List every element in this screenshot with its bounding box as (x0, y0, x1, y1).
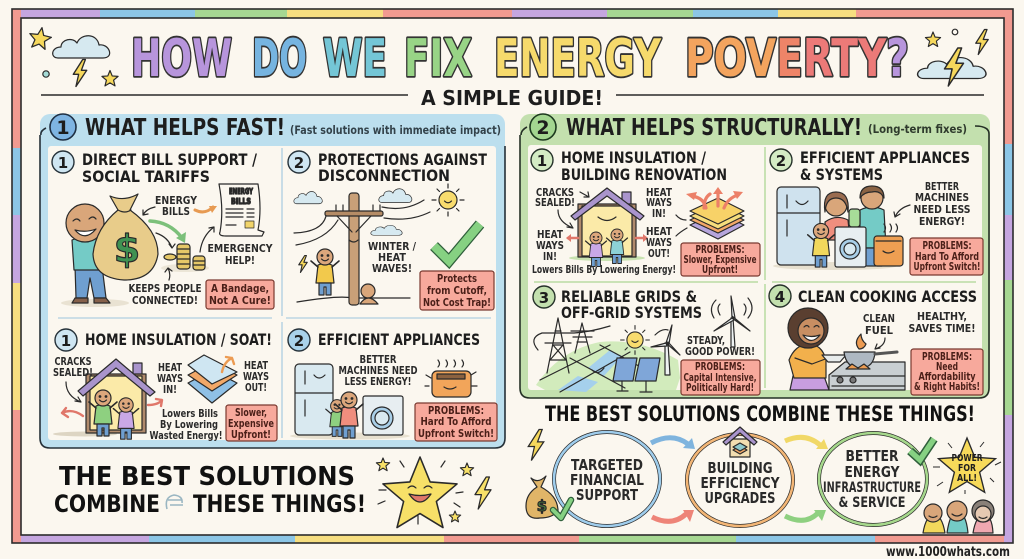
sub-panel: direct bill support: SOCIAL TARIFFS (82, 167, 210, 186)
labels: home insulation soat: Lowers Bills (162, 407, 218, 420)
callout: protects from cutoff: Protects (437, 273, 477, 285)
icon: bill document: BILLS (231, 197, 251, 206)
icon: green check on circle (910, 439, 934, 460)
callout: slower expensive upfront: Upfront! (231, 429, 271, 441)
title: ENERGY (494, 29, 662, 89)
text: best solutions left: THESE THINGS! (193, 490, 366, 518)
callout: need affordability: Need (936, 361, 958, 373)
labels: home insulation building renovation: SEALED! (535, 196, 575, 209)
labels: clean fuel and healthy (863, 310, 976, 337)
labels: home insulation soat: HEAT (244, 359, 268, 372)
labels: clean fuel and healthy: FUEL (865, 324, 893, 337)
labels: home insulation soat: SEALED! (53, 366, 93, 379)
sub-panel: home insulation building renovation: BUILDING RENOVATION (561, 165, 727, 184)
labels: home insulation soat: WAYS (243, 370, 269, 383)
callout: a bandage: Not A Cure! (209, 295, 271, 307)
subtitle: A SIMPLE GUIDE! (421, 86, 603, 110)
labels: direct bill support: CONNECTED! (132, 294, 198, 307)
callout: slower expensive upfront: Upfront! (702, 264, 738, 276)
labels: better machines (914, 180, 971, 228)
labels: home insulation soat: IN! (163, 383, 177, 396)
labels: efficient appliances: LESS ENERGY! (344, 375, 412, 388)
callout: hard to afford: PROBLEMS: (428, 405, 484, 417)
heading: what helps structurally: WHAT HELPS STRUCTURALLY! (566, 115, 862, 141)
callout: hard to afford (415, 403, 497, 441)
callout: slower expensive upfront (681, 243, 760, 276)
sub-panel: efficient appliances: EFFICIENT APPLIANCES (318, 330, 480, 349)
labels: home insulation soat: Wasted Energy! (150, 429, 222, 442)
sub-panel: protections against disconnection: PROTECTIONS AGAINST (318, 150, 487, 169)
sub-panel: protections against disconnection (288, 150, 494, 310)
star: power for all: ALL! (957, 473, 977, 484)
callout: capital intensive (681, 360, 760, 395)
sub-panel: reliable grids: OFF-GRID SYSTEMS (561, 303, 702, 322)
sub-panel: direct bill support: DIRECT BILL SUPPORT / (82, 150, 257, 169)
circle: targeted financial support: TARGETED (571, 456, 643, 474)
callout: hard to afford (910, 238, 983, 275)
icon: woman cooking at stove (788, 308, 905, 390)
sub-panel: clean cooking access: CLEAN COOKING ACCESS (798, 287, 977, 306)
sub-panel: home insulation building renovation: HOME INSULATION / (561, 148, 706, 167)
title decoration left: cloud, stars, bolt (28, 26, 118, 87)
labels: home insulation building renovation: OUT! (648, 247, 670, 260)
icon: person with money bag (61, 194, 158, 307)
labels: direct bill support: EMERGENCY (208, 242, 273, 255)
icon: bill document: ENERGY (229, 187, 253, 196)
title decoration right: cloud, stars, bolts (918, 29, 988, 86)
labels: home insulation building renovation: IN! (652, 207, 666, 220)
labels: home insulation building renovation: WAYS (646, 236, 672, 249)
icon: house on building efficiency circle (723, 427, 757, 457)
callout: slower expensive upfront: PROBLEMS: (696, 244, 744, 256)
labels: home insulation building renovation: HEAT (537, 228, 563, 241)
callout: slower expensive upfront: Slower, Expensive (684, 254, 756, 266)
panel: what helps structurally (520, 114, 990, 398)
sub-panel: efficient appliances and systems: EFFICIENT APPLIANCES (800, 148, 970, 167)
callout: hard to afford: Hard To Afford (420, 416, 492, 428)
circle: better energy infrastructure: ENERGY (844, 463, 900, 481)
sub-panel: efficient appliances (288, 329, 497, 441)
callout: capital intensive: PROBLEMS: (695, 361, 745, 373)
callout: protects from cutoff: Not Cost Trap! (423, 297, 491, 309)
sub-panel: efficient appliances: 2 (294, 332, 304, 350)
title (131, 29, 909, 89)
labels: winter heat waves (368, 240, 417, 275)
sub-panel: efficient appliances and systems: 2 (776, 152, 786, 170)
sub-panel: clean cooking access: 4 (775, 288, 785, 306)
heading: what helps structurally: (Long-term fixes) (868, 122, 967, 136)
labels: efficient appliances (338, 353, 418, 388)
labels: home insulation soat: CRACKS (54, 355, 92, 368)
labels: better machines: ENERGY! (919, 215, 965, 228)
icon: smiling star (376, 457, 491, 528)
title: HOW (131, 29, 232, 89)
circle: better energy infrastructure (819, 433, 927, 525)
icon: bill document (219, 184, 264, 236)
callout: protects from cutoff (420, 271, 494, 310)
icon: utility pole scene (294, 184, 464, 305)
icon: coins and arrows (143, 206, 217, 280)
labels: winter heat waves: WAVES! (372, 262, 412, 275)
circle: targeted financial support (554, 432, 660, 526)
circle: better energy infrastructure: & SERVICE (838, 495, 906, 511)
circle: building efficiency upgrades: EFFICIENCY (700, 474, 780, 492)
title: WE (323, 29, 387, 89)
sub-panel: protections against disconnection: DISCONNECTION (318, 166, 450, 185)
icon: three happy people (923, 500, 994, 533)
labels: home insulation building renovation: Lowers Bills By Lowering Energy! (532, 263, 676, 276)
labels: steady good power: GOOD POWER! (685, 345, 755, 358)
icon: green field with solar panels (536, 341, 680, 392)
labels: direct bill support: ENERGY (155, 194, 198, 207)
star: power for all: POWER (952, 453, 983, 464)
icon: appliances and family (290, 360, 477, 440)
callout: need affordability: PROBLEMS: (922, 351, 972, 363)
callout: a bandage: A Bandage, (211, 283, 269, 295)
labels: clean fuel and healthy: CLEAN (863, 312, 895, 325)
star: power for all (933, 438, 1001, 494)
sub-panel: reliable grids: 3 (539, 289, 549, 307)
sub-panel: efficient appliances and systems: & SYSTEMS (800, 165, 883, 184)
panel: what helps fast (40, 114, 505, 448)
labels: efficient appliances: MACHINES NEED (338, 364, 418, 377)
star: power for all: FOR (958, 463, 976, 474)
labels: home insulation building renovation: WAYS (646, 196, 672, 209)
labels: home insulation building renovation: HEAT (646, 186, 672, 199)
callout: hard to afford: Upfront Switch! (418, 428, 494, 440)
sub-panel: home insulation soat (53, 329, 277, 442)
callout: slower expensive upfront: Slower, (235, 407, 267, 419)
labels: efficient appliances: BETTER (360, 353, 397, 366)
callout: need affordability: & Right Habits! (914, 381, 980, 393)
icon: insulation layers (188, 355, 237, 403)
circle: targeted financial support: SUPPORT (576, 486, 639, 504)
icon: electricity pylons (534, 318, 610, 373)
labels: direct bill support: HELP! (225, 254, 255, 267)
labels: better machines: MACHINES (915, 191, 969, 204)
labels: winter heat waves: WINTER / (368, 240, 417, 253)
labels: direct bill support: BILLS (162, 205, 190, 218)
labels: clean fuel and healthy: SAVES TIME! (908, 322, 976, 335)
heading: what helps fast: 1 (56, 117, 70, 139)
icon: insulation layers with arrows (686, 187, 744, 239)
title: POVERTY? (685, 29, 909, 89)
sub-panel: protections against disconnection: 2 (294, 154, 304, 172)
icon: money bag and check (526, 476, 571, 518)
icon: house with kids (53, 359, 162, 439)
callout: need affordability: Affordability (918, 371, 976, 383)
callout: capital intensive: Capital Intensive, (684, 372, 756, 384)
text: best solutions left: COMBINE (54, 490, 160, 518)
icon: money bag and check: $ (537, 497, 547, 515)
labels: home insulation soat: By Lowering (160, 418, 218, 431)
sub-panel: direct bill support (52, 150, 274, 309)
labels: home insulation soat: OUT! (245, 381, 267, 394)
callout: capital intensive: Politically Hard! (686, 382, 754, 394)
arrows: connecting circles (651, 437, 828, 522)
labels: clean fuel and healthy: HEALTHY, (917, 310, 967, 323)
labels: home insulation building renovation: WAYS (536, 239, 564, 252)
circle: building efficiency upgrades: UPGRADES (704, 489, 776, 507)
callout: a bandage (206, 280, 274, 309)
labels: better machines: BETTER (925, 180, 959, 193)
text: best solutions left: THE BEST SOLUTIONS (59, 462, 355, 492)
icon: lightning bolt (528, 430, 544, 460)
labels: better machines: NEED LESS (914, 203, 971, 216)
labels: home insulation building renovation: CRACKS (536, 186, 574, 199)
labels: winter heat waves: HEAT (378, 251, 406, 264)
labels: steady good power: STEADY, (687, 334, 725, 347)
labels: home insulation building renovation (532, 186, 676, 276)
heading: what helps structurally: 2 (536, 117, 550, 139)
sub-panel: home insulation building renovation (531, 148, 760, 276)
title: FIX (404, 29, 472, 89)
labels: home insulation soat: WAYS (157, 372, 183, 385)
sub-panel: reliable grids: RELIABLE GRIDS & (561, 287, 697, 306)
circle: better energy infrastructure: INFRASTRUCTURE (823, 480, 921, 496)
text: best solutions left (54, 462, 366, 518)
sub-panel: efficient appliances and systems (770, 148, 983, 275)
sub-panel: home insulation building renovation: 1 (537, 152, 547, 170)
labels: direct bill support: KEEPS PEOPLE (128, 282, 202, 295)
circle: targeted financial support: FINANCIAL (570, 471, 644, 489)
labels: home insulation building renovation: HEAT (646, 225, 672, 238)
icon: green check mark (434, 224, 480, 261)
circle: better energy infrastructure: BETTER (846, 447, 899, 465)
circle: building efficiency upgrades (687, 434, 793, 526)
icon: family with appliances (773, 186, 910, 270)
heading: what helps fast (50, 114, 501, 141)
circle: building efficiency upgrades: BUILDING (708, 459, 772, 477)
labels: steady good power (685, 334, 755, 358)
callout: hard to afford: Upfront Switch! (914, 261, 980, 273)
callout: slower expensive upfront (226, 405, 277, 441)
labels: direct bill support (128, 194, 273, 307)
icon: house with children (558, 188, 687, 266)
icon: sun and wind turbines (621, 296, 752, 375)
labels: home insulation soat (53, 355, 269, 442)
sub-panel: home insulation soat: HOME INSULATION / SOAT! (85, 330, 272, 349)
title: DO (252, 29, 307, 89)
labels: home insulation building renovation: IN! (543, 250, 557, 263)
callout: protects from cutoff: from Cutoff, (427, 285, 487, 297)
sub-panel: home insulation soat: 1 (61, 332, 71, 350)
labels: home insulation soat: HEAT (158, 361, 182, 374)
callout: hard to afford: PROBLEMS: (922, 240, 972, 252)
callout: slower expensive upfront: Expensive (228, 418, 274, 430)
sub-panel: clean cooking access (769, 285, 983, 395)
sub-panel: direct bill support: 1 (58, 154, 68, 172)
callout: hard to afford: Hard To Afford (915, 251, 979, 263)
icon: person with money bag: $ (114, 227, 140, 271)
callout: need affordability (911, 349, 983, 395)
heading: what helps fast: (Fast solutions with immediate impact) (290, 123, 501, 137)
sub-panel: reliable grids (533, 286, 760, 395)
heading: what helps fast: WHAT HELPS FAST! (85, 115, 285, 141)
